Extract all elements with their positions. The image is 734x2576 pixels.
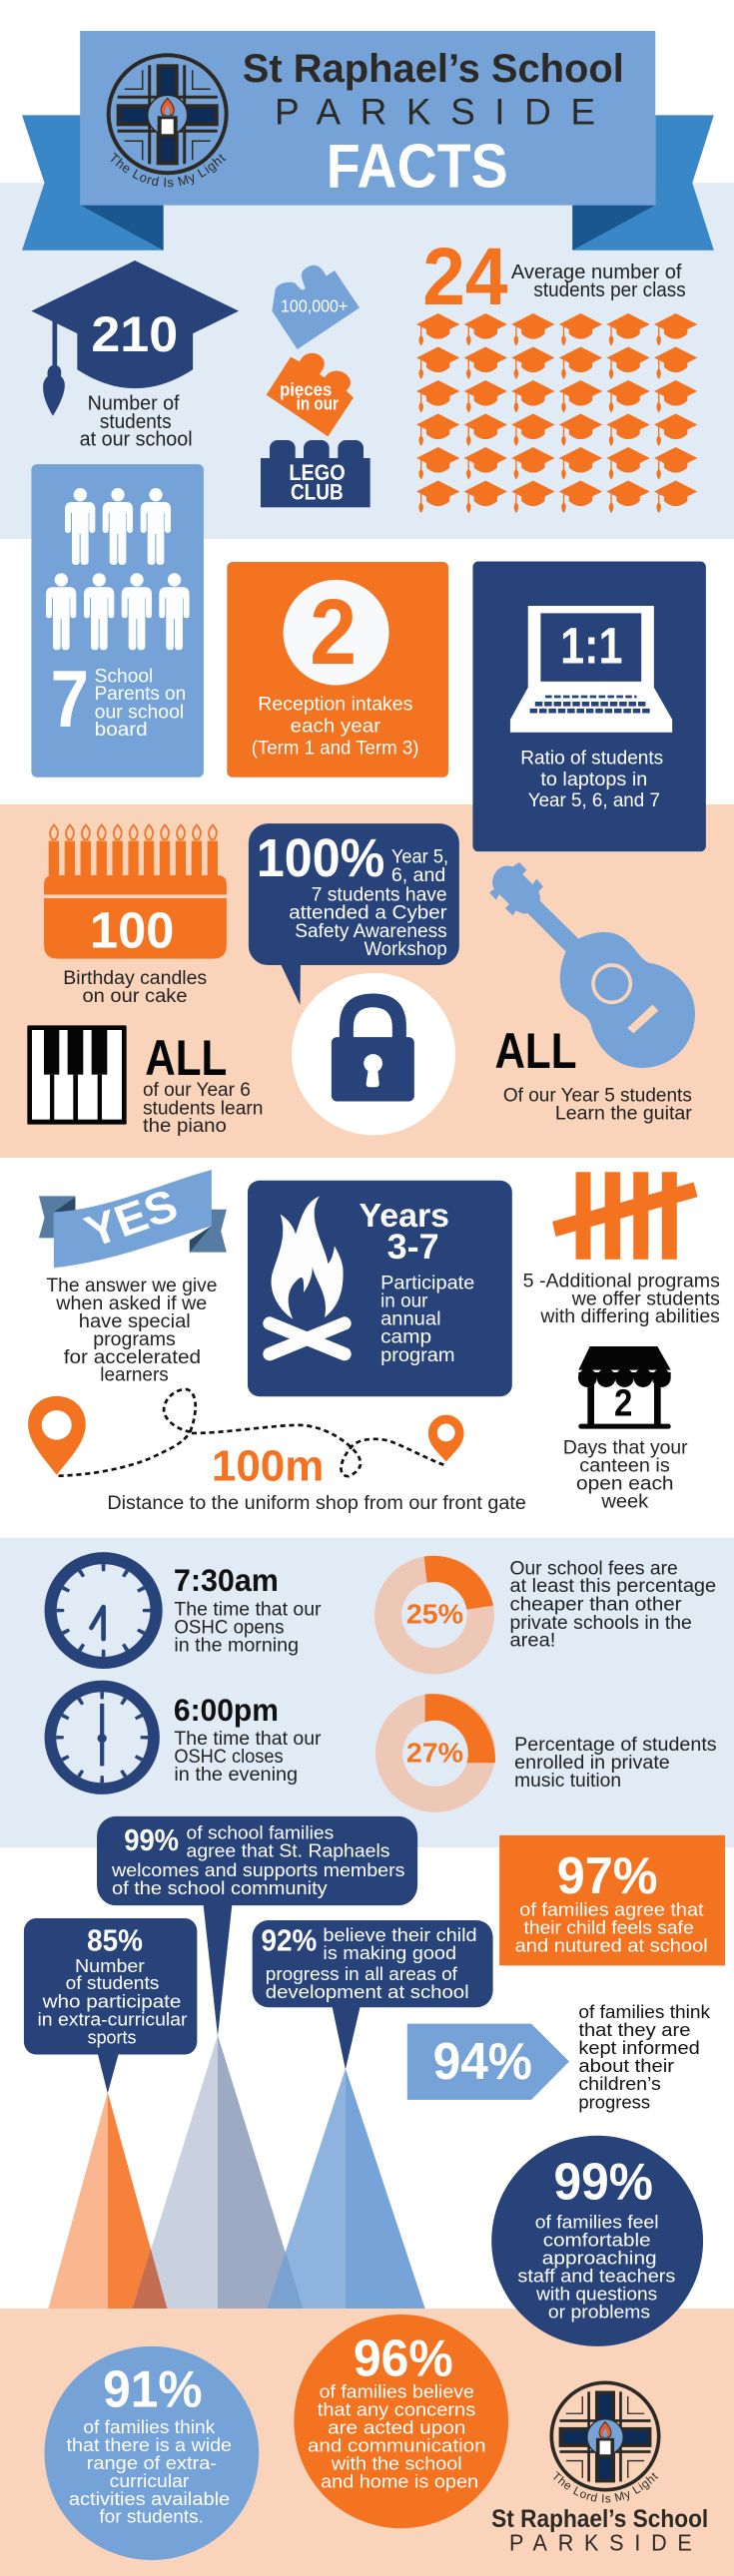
title (243, 47, 624, 201)
panel: camp program: in our (380, 1290, 428, 1311)
logo: school crest: The Lord Is My Light (110, 152, 226, 188)
icon: graduation cap with 210: 210 (91, 306, 178, 362)
statistic: 24 students per class: 24 (422, 231, 508, 321)
icon: orange puzzle piece: pieces (280, 379, 332, 400)
panel: school parents: 7 (51, 655, 89, 745)
panel: 97 percent safe: and nutured at school (515, 1934, 708, 1956)
circle: 99 percent comfortable: with questions (535, 2283, 657, 2305)
callout: 99 percent welcome: welcomes and supports members (111, 1859, 404, 1880)
icon: graduation cap with 210 (31, 260, 239, 416)
text: number of students: Number of (88, 392, 180, 415)
arrow: 94 percent: 94% (433, 2032, 532, 2090)
icon: piano keys (27, 1025, 127, 1125)
text: opening time: in the morning (174, 1635, 299, 1656)
statistic: all year 6 learn piano: ALL (145, 1030, 227, 1086)
text: school fees (509, 1558, 716, 1652)
text: closing time: The time that our (174, 1728, 322, 1750)
callout: 92 percent progress: is making good (323, 1941, 456, 1963)
chart: donut 27 percent (375, 1694, 495, 1812)
ribbon banner (22, 31, 714, 251)
circle: 96 percent communication: 96% (354, 2328, 453, 2387)
text: canteen days: week (600, 1491, 649, 1512)
callout: 99 percent welcome: of school families (187, 1821, 334, 1842)
circle: 96 percent communication: that any concerns (318, 2398, 475, 2420)
text: additional programs: we offer students (571, 1288, 720, 1309)
panel: reception intakes: Reception intakes (258, 694, 412, 716)
statistic: all year 5 learn guitar: Of our Year 5 students (503, 1085, 692, 1106)
text: opening time: OSHC opens (174, 1617, 285, 1638)
icon: seven people (46, 488, 190, 650)
circle: 91 percent activities: curricular (110, 2469, 189, 2491)
callout: cyber safety: Safety Awareness (295, 920, 447, 942)
callout: 99 percent welcome: agree that St. Raphaels (187, 1839, 389, 1860)
icon grid: graduation caps (416, 313, 697, 513)
callout: 85 percent sports: in extra-curricular (38, 2008, 188, 2030)
circle: 91 percent activities: that there is a wide (67, 2433, 232, 2455)
logo: footer crest: The Lord Is My Light (553, 2471, 659, 2503)
circle: 91 percent activities: range of extra- (87, 2451, 217, 2473)
panel: school parents (31, 464, 204, 777)
text: kept informed: kept informed (578, 2037, 700, 2058)
text: number of students: students (100, 410, 172, 433)
text: school fees: private schools in the (509, 1612, 692, 1634)
text: kept informed: that they are (578, 2019, 690, 2040)
statistic: 100m distance (107, 1443, 526, 1514)
footer school name (491, 2506, 708, 2556)
text: accelerated learners: have special (79, 1310, 191, 1332)
text: music tuition: music tuition (514, 1770, 621, 1792)
text: music tuition: Percentage of students (514, 1735, 717, 1756)
text: additional programs (523, 1271, 720, 1327)
text: music tuition: enrolled in private (514, 1752, 670, 1774)
panel: reception intakes: each year (291, 716, 380, 737)
callout: 92 percent progress: 92% (262, 1924, 317, 1958)
logo: footer crest (549, 2381, 661, 2503)
callout: cyber safety: 7 students have (312, 883, 447, 905)
section: board, intakes, laptops, music (31, 464, 706, 1137)
circle: 96 percent communication: of families believe (320, 2380, 474, 2402)
text: school fees: Our school fees are (509, 1558, 678, 1579)
section: programs, distance, times, fees (28, 1170, 720, 1812)
icon: canteen shop: 2 (614, 1381, 632, 1423)
text: kept informed: children’s (578, 2072, 661, 2094)
section: header and top statistics (22, 31, 714, 451)
text: opening time: 7:30am (174, 1563, 279, 1598)
section: family survey (24, 1816, 725, 2560)
panel: laptop ratio: Year 5, 6, and 7 (528, 789, 660, 811)
statistic: all year 5 learn guitar (494, 1023, 692, 1124)
callout: cyber safety: Year 5, (391, 846, 448, 868)
chart: donut 27 percent: 27% (406, 1738, 463, 1769)
text: accelerated learners: programs (93, 1328, 176, 1350)
panel: camp program (248, 1181, 512, 1396)
text: birthday candles: on our cake (83, 985, 188, 1007)
panel: 97 percent safe: of families agree that (519, 1898, 704, 1920)
circle: 96 percent communication (294, 2315, 508, 2528)
icon: yes ribbon (39, 1170, 227, 1268)
panel: camp program: Years (360, 1198, 449, 1235)
circle: 91 percent activities: 91% (103, 2359, 202, 2418)
icon: birthday cake (44, 825, 227, 959)
icon: clock 7:30 (45, 1552, 163, 1669)
callout: 92 percent progress (253, 1920, 493, 2069)
circle: 96 percent communication: and home is open (321, 2470, 478, 2491)
text: accelerated learners (46, 1275, 218, 1386)
panel: reception intakes: (Term 1 and Term 3) (252, 738, 419, 759)
circle: 99 percent comfortable: 99% (554, 2152, 653, 2211)
callout: 85 percent sports: of students (66, 1972, 159, 1993)
text: accelerated learners: when asked if we (55, 1292, 207, 1314)
panel: reception intakes: 2 (310, 580, 357, 684)
icon: yes ribbon: YES (78, 1180, 184, 1257)
icon: birthday cake: 100 (90, 902, 174, 959)
callout: 85 percent sports: Number (75, 1954, 145, 1976)
icon: lego brick: LEGO (289, 460, 346, 485)
arrow: 94 percent (407, 2024, 569, 2100)
panel: school parents: board (95, 719, 148, 741)
text: school fees: at least this percentage (509, 1576, 716, 1597)
panel: laptop ratio: Ratio of students (520, 748, 663, 769)
text: opening time: The time that our (174, 1599, 322, 1620)
panel: 97 percent safe: 97% (557, 1846, 658, 1904)
statistic: all year 6 learn piano: the piano (143, 1115, 227, 1137)
statistic: 100m distance: Distance to the uniform shop from our front gate (107, 1492, 526, 1514)
callout: 99 percent welcome (97, 1816, 417, 2036)
icon: large map pin (28, 1396, 86, 1475)
statistic: all year 5 learn guitar: Learn the guitar (555, 1103, 692, 1124)
circle: 99 percent comfortable: comfortable (543, 2229, 651, 2250)
route: dotted path between pins (59, 1389, 444, 1476)
text: music tuition (514, 1735, 717, 1792)
statistic: all year 5 learn guitar: ALL (494, 1023, 577, 1079)
icon: lego brick: CLUB (291, 480, 344, 505)
panel: 97 percent safe: their child feels safe (524, 1916, 694, 1938)
circle: 96 percent communication: with the school (331, 2452, 462, 2474)
panel: camp program: camp (380, 1326, 431, 1348)
statistic: 100m distance: 100m (212, 1443, 324, 1490)
icon: small map pin (428, 1415, 464, 1461)
panel: reception intakes (227, 562, 448, 777)
logo: school crest (106, 53, 229, 188)
text: additional programs: 5 -Additional programs (523, 1271, 720, 1291)
callout: 85 percent sports: sports (88, 2026, 136, 2048)
statistic: all year 6 learn piano: students learn (143, 1097, 263, 1119)
chart: donut 25 percent (374, 1556, 494, 1674)
statistic: all year 6 learn piano: of our Year 6 (143, 1079, 251, 1101)
circle: 91 percent activities: for students. (99, 2505, 204, 2527)
callout: cyber safety: attended a Cyber (289, 902, 447, 924)
title: FACTS (327, 132, 508, 201)
panel: camp program: Participate (380, 1273, 474, 1294)
text: accelerated learners: learners (100, 1364, 169, 1386)
icon: tally marks (552, 1172, 697, 1260)
text: kept informed: about their (578, 2054, 674, 2076)
callout: 85 percent sports: who participate (42, 1990, 181, 2012)
statistic: 24 students per class (422, 231, 686, 321)
icon: orange puzzle piece (267, 353, 354, 436)
callout: 92 percent progress: progress in all areas of (266, 1962, 458, 1984)
subtitle: parkside: PARKSIDE (275, 92, 595, 133)
chart: donut 25 percent: 25% (406, 1599, 463, 1630)
text: kept informed (578, 2001, 711, 2112)
text: school fees: area! (509, 1630, 555, 1652)
text: accelerated learners: for accelerated (64, 1346, 201, 1368)
text: number of students (80, 392, 193, 451)
icon: blue puzzle piece: 100,000+ (281, 295, 348, 315)
text: canteen days: Days that your (563, 1437, 688, 1458)
text: closing time (174, 1693, 322, 1786)
panel: laptop ratio: to laptops in (540, 769, 647, 790)
callout: cyber safety: Workshop (365, 938, 447, 960)
footer school name: St Raphael’s School (491, 2506, 708, 2533)
icon: campfire (270, 1196, 345, 1354)
circle: 99 percent comfortable: or problems (548, 2301, 650, 2322)
circle: 99 percent comfortable: staff and teachers (517, 2265, 675, 2287)
panel: 97 percent safe (499, 1835, 725, 1965)
lego club puzzle group (261, 265, 370, 507)
icon: canteen shop (578, 1346, 671, 1429)
text: closing time: 6:00pm (174, 1693, 279, 1728)
text: canteen days (563, 1437, 688, 1512)
panel: school parents: School (95, 665, 153, 687)
text: additional programs: with differing abilities (539, 1306, 720, 1327)
panel: school parents: Parents on (95, 683, 186, 705)
callout: cyber safety: 6, and (391, 864, 445, 886)
panel: camp program: program (380, 1344, 455, 1366)
text: kept informed: of families think (578, 2001, 711, 2022)
callout: 99 percent welcome: 99% (124, 1823, 179, 1857)
text: birthday candles (63, 967, 207, 1007)
panel: school parents: our school (95, 702, 184, 723)
callout: 99 percent welcome: of the school community (112, 1877, 329, 1898)
circle: 99 percent comfortable: of families feel (535, 2211, 659, 2232)
text: kept informed: progress (578, 2091, 650, 2112)
panel: camp program: annual (380, 1308, 441, 1329)
callout: cyber safety (249, 823, 459, 1005)
text: birthday candles: Birthday candles (63, 967, 207, 989)
icon: guitar (489, 862, 695, 1068)
footer school name: PARKSIDE (509, 2530, 692, 2556)
panel: camp program: 3-7 (387, 1228, 439, 1267)
circle: 99 percent comfortable (491, 2136, 703, 2346)
callout: 85 percent sports: 85% (87, 1924, 143, 1958)
callout: 92 percent progress: development at school (266, 1981, 469, 2002)
icon: blue puzzle piece (272, 265, 360, 349)
statistic: all year 6 learn piano (143, 1030, 263, 1137)
callout: 85 percent sports (24, 1918, 197, 2093)
icon: clock 6:00 (45, 1681, 160, 1795)
text: canteen days: canteen is (579, 1455, 670, 1476)
text: number of students: at our school (80, 428, 193, 451)
text: opening time (174, 1563, 322, 1656)
callout: 92 percent progress: believe their child (323, 1923, 477, 1945)
icon: orange puzzle piece: in our (297, 393, 339, 414)
circle: 96 percent communication: and communication (308, 2434, 486, 2456)
panel: laptop ratio (472, 562, 706, 851)
callout: cyber safety: 100% (257, 826, 384, 888)
text: closing time: OSHC closes (174, 1747, 284, 1768)
circle: 91 percent activities: of families think (83, 2416, 216, 2437)
chart: triangle spotlights (48, 2035, 425, 2309)
text: accelerated learners: The answer we give (46, 1275, 218, 1296)
circle: 91 percent activities (45, 2346, 259, 2560)
icon: padlock (292, 973, 455, 1135)
panel: laptop ratio: 1:1 (560, 618, 622, 675)
icon: lego brick (261, 440, 370, 507)
text: canteen days: open each (576, 1473, 674, 1494)
circle: 99 percent comfortable: approaching (542, 2247, 657, 2269)
text: school fees: cheaper than other (509, 1594, 682, 1615)
circle: 91 percent activities: activities available (69, 2487, 230, 2509)
text: closing time: in the evening (174, 1764, 298, 1786)
circle: 96 percent communication: are acted upon (328, 2416, 465, 2438)
